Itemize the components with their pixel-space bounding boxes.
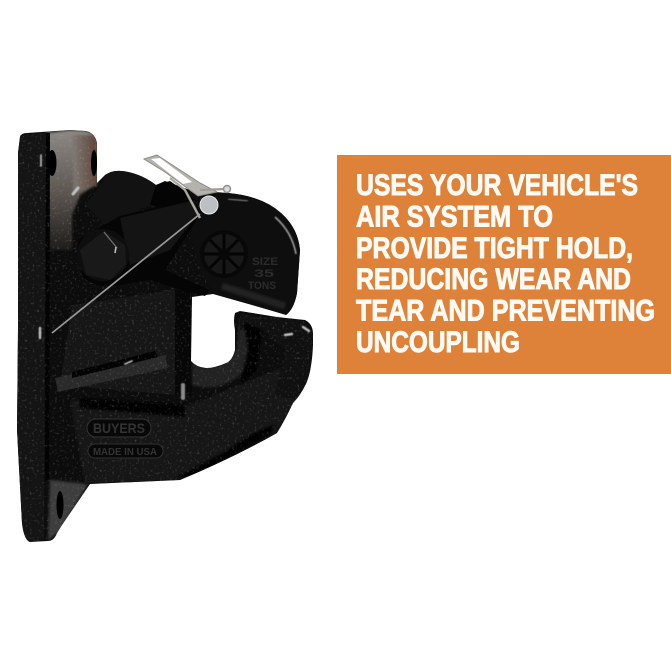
hook body silhouette [17,130,313,542]
plate edge strip [17,133,46,542]
hook nose [240,320,311,379]
plate highlights [40,155,309,398]
ring [224,186,230,192]
latch cap: 35 [254,268,274,280]
lower body shading [72,369,302,485]
latch cap: TONS [248,280,276,292]
mounting plate top face [46,130,97,250]
body shading and texture [17,130,317,545]
pintle hook product photo [17,130,317,545]
callout text: AIR SYSTEM TO [356,200,553,234]
callout text: UNCOUPLING [356,326,520,359]
callout panel [337,155,671,374]
pull wire [52,214,200,333]
silver latch handle [144,155,226,218]
BUYERS plate: BUYERS [93,420,145,436]
orange box [337,155,671,374]
hex bolt [77,229,129,281]
callout text [356,169,655,359]
infographic canvas [17,130,671,542]
mounting holes [48,150,97,519]
steel pin [200,196,218,214]
cap bolt wheel [200,230,248,278]
plate lower right face [48,480,88,541]
rib [55,355,168,392]
lock body [86,171,156,225]
lock arm [78,198,210,296]
embossed cap text: SIZE [252,256,278,268]
center block [60,290,175,395]
embossed logo plates [87,419,163,458]
origin plate: MADE IN USA [93,447,157,458]
speckle texture [17,130,317,545]
hook opening [191,294,287,368]
latch cap [190,193,300,315]
